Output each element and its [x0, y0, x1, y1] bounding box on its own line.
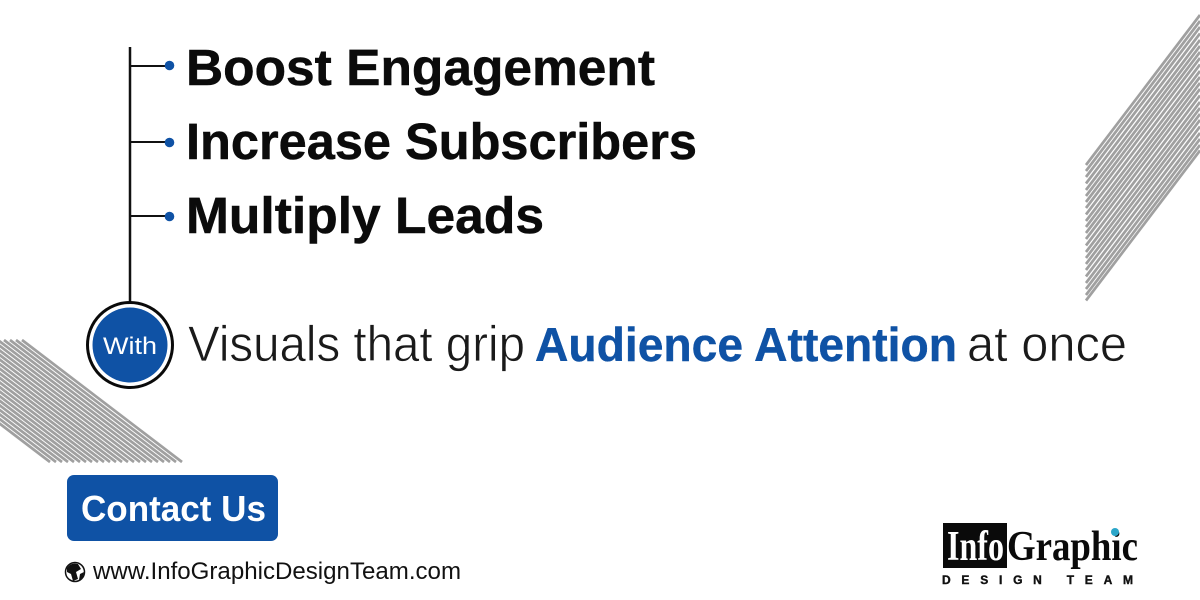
- website url: www.InfoGraphicDesignTeam.com: [92, 558, 461, 585]
- heading: Multiply Leads: Multiply Leads: [186, 187, 544, 244]
- icon: globe: [66, 562, 84, 582]
- heading: Increase Subscribers: Increase Subscribers: [186, 113, 697, 170]
- logo: InfoGraphic Design Team: Graphic: [1007, 524, 1138, 570]
- badge: With: [88, 302, 172, 388]
- tagline: Visuals that grip Audience Attention at once: [188, 316, 1127, 372]
- decorative stripes: top right: [1086, 15, 1200, 300]
- timeline connector with branches and dots: [130, 47, 174, 303]
- logo: InfoGraphic Design Team: DESIGN TEAM: [942, 573, 1133, 587]
- button: Contact Us: Contact Us: [81, 488, 266, 529]
- button: Contact Us: [67, 475, 278, 541]
- tagline: Visuals that grip Audience Attention at once: Visuals that grip: [188, 316, 525, 372]
- heading: Boost Engagement: Boost Engagement: [186, 39, 655, 96]
- logo: InfoGraphic Design Team: Info: [947, 524, 1004, 570]
- tagline: Visuals that grip Audience Attention at once: at once: [967, 316, 1127, 372]
- logo: InfoGraphic Design Team: [942, 523, 1138, 587]
- badge: With: With: [103, 333, 157, 360]
- decorative stripes: bottom left: [0, 340, 182, 462]
- tagline: Visuals that grip Audience Attention at once: Audience Attention: [535, 318, 957, 371]
